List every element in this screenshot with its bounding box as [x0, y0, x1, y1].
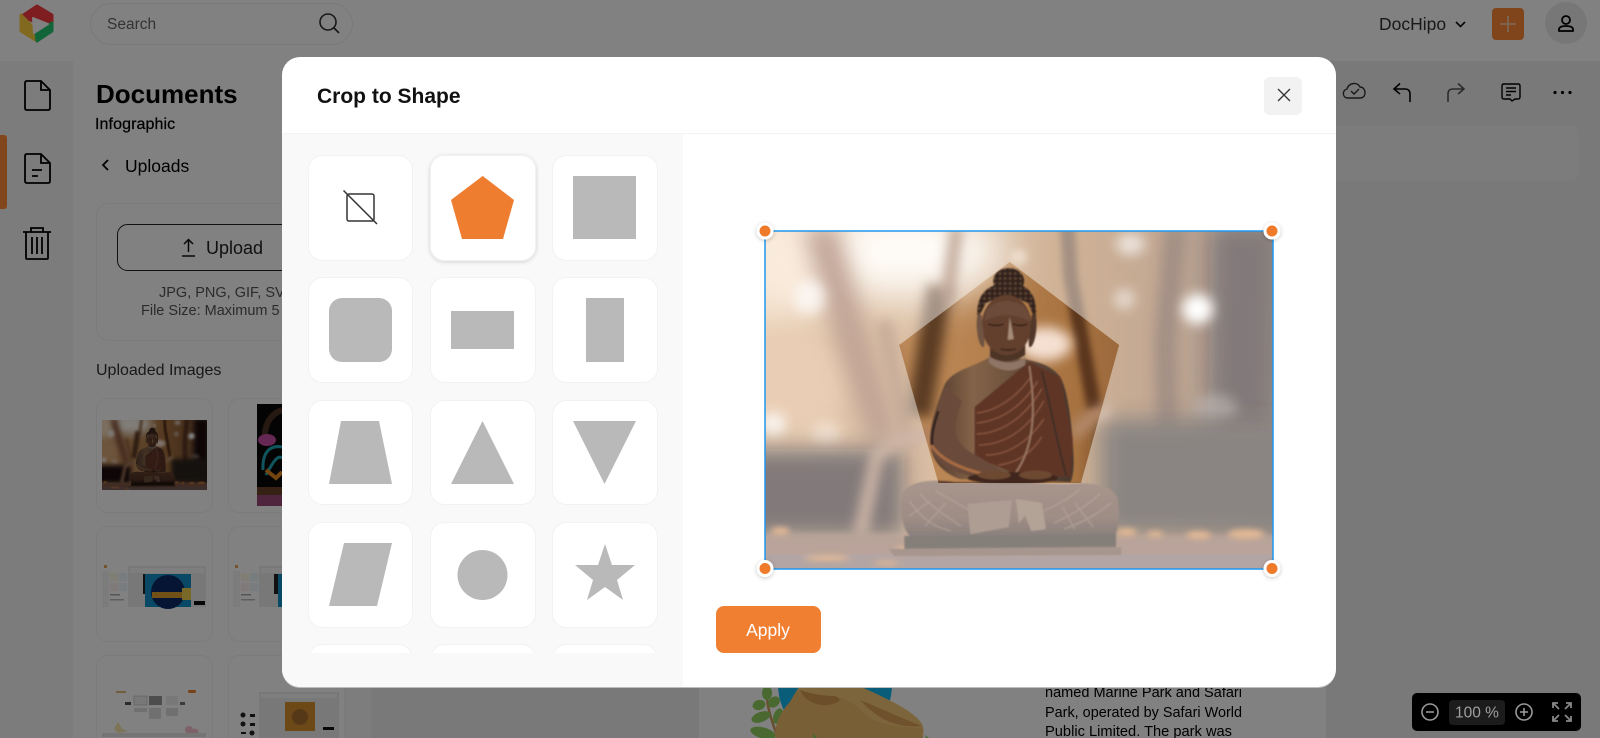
icon: document: [25, 81, 50, 110]
shape card: no crop: [343, 190, 378, 224]
zoom control: 100 %: [1455, 704, 1499, 722]
partially visible shape cards: [308, 644, 658, 738]
crop preview image: [719, 201, 1297, 580]
document page: [750, 688, 1242, 738]
shape card: wide rectangle: [451, 311, 514, 349]
upload panel: File Size: Maximum 5 MB: [141, 303, 305, 319]
thumbnail card: web page screenshot: [96, 656, 212, 738]
logo: DocHipo: [21, 6, 52, 41]
shape card: pentagon (selected): [430, 156, 536, 260]
icon: trash: [23, 228, 51, 259]
app background: top bar: [0, 0, 1600, 61]
upload panel: [96, 204, 356, 340]
apply button: [716, 606, 821, 653]
add button: [1492, 8, 1524, 40]
illustration: rock with leaves: [750, 688, 929, 738]
shape picker panel: [282, 153, 658, 687]
body text excerpt: [1045, 684, 1242, 738]
shape card: circle: [458, 550, 508, 600]
shape card: star: [575, 544, 635, 600]
documents panel: [73, 61, 345, 738]
account name menu: DocHipo: [1379, 14, 1446, 34]
thumbnail card: second screenshot: [228, 526, 344, 642]
heading: Documents: Documents: [96, 79, 238, 109]
body text excerpt: named Marine Park and Safari: [1045, 684, 1242, 701]
label: Uploaded Images: Uploaded Images: [96, 362, 221, 379]
active rail marker: [0, 135, 7, 209]
sidebar: navigation rail: [0, 61, 73, 738]
upload panel: Upload: [206, 238, 263, 258]
icon: redo: [1448, 84, 1464, 102]
shape card: trapezoid: [329, 421, 392, 484]
label: Infographic: Infographic: [95, 116, 175, 133]
shape card: parallelogram: [329, 543, 392, 606]
shape card: inverted triangle: [573, 421, 636, 484]
thumbnail card: neon figure: [228, 398, 344, 512]
shape card: tall rectangle: [586, 298, 624, 362]
crop handles: [758, 224, 1279, 576]
apply button: Apply: [746, 620, 790, 640]
icon: comment: [1502, 84, 1520, 101]
modal: Crop to Shape: [282, 57, 1336, 738]
icon: cloud saved: [1343, 83, 1365, 98]
close button: [1264, 77, 1302, 115]
search box: Search: [107, 16, 156, 33]
shape card: triangle: [451, 421, 514, 484]
user avatar: [1545, 2, 1587, 44]
back link: Uploads: Uploads: [125, 156, 189, 176]
modal title: Crop to Shape: [317, 85, 461, 108]
icon: more menu: [1553, 91, 1572, 94]
zoom control: [1412, 693, 1581, 731]
faded area outside crop shape: [765, 231, 1273, 569]
body text excerpt: Park, operated by Safari World: [1045, 704, 1242, 721]
shape card: square: [573, 176, 636, 239]
thumbnail card: screenshot with blue poster: [96, 526, 212, 642]
search box: [90, 4, 352, 44]
icon: undo: [1394, 84, 1410, 102]
canvas workspace: [371, 61, 1600, 738]
toolbar panel: [1300, 125, 1578, 181]
icon: document with lines: [25, 154, 50, 183]
thumbnail card: Buddha photo: [92, 398, 212, 512]
thumbnail card: poster screenshot: [228, 656, 344, 738]
shape card: rounded square: [329, 298, 392, 362]
upload panel: JPG, PNG, GIF, SVG.: [159, 285, 300, 301]
